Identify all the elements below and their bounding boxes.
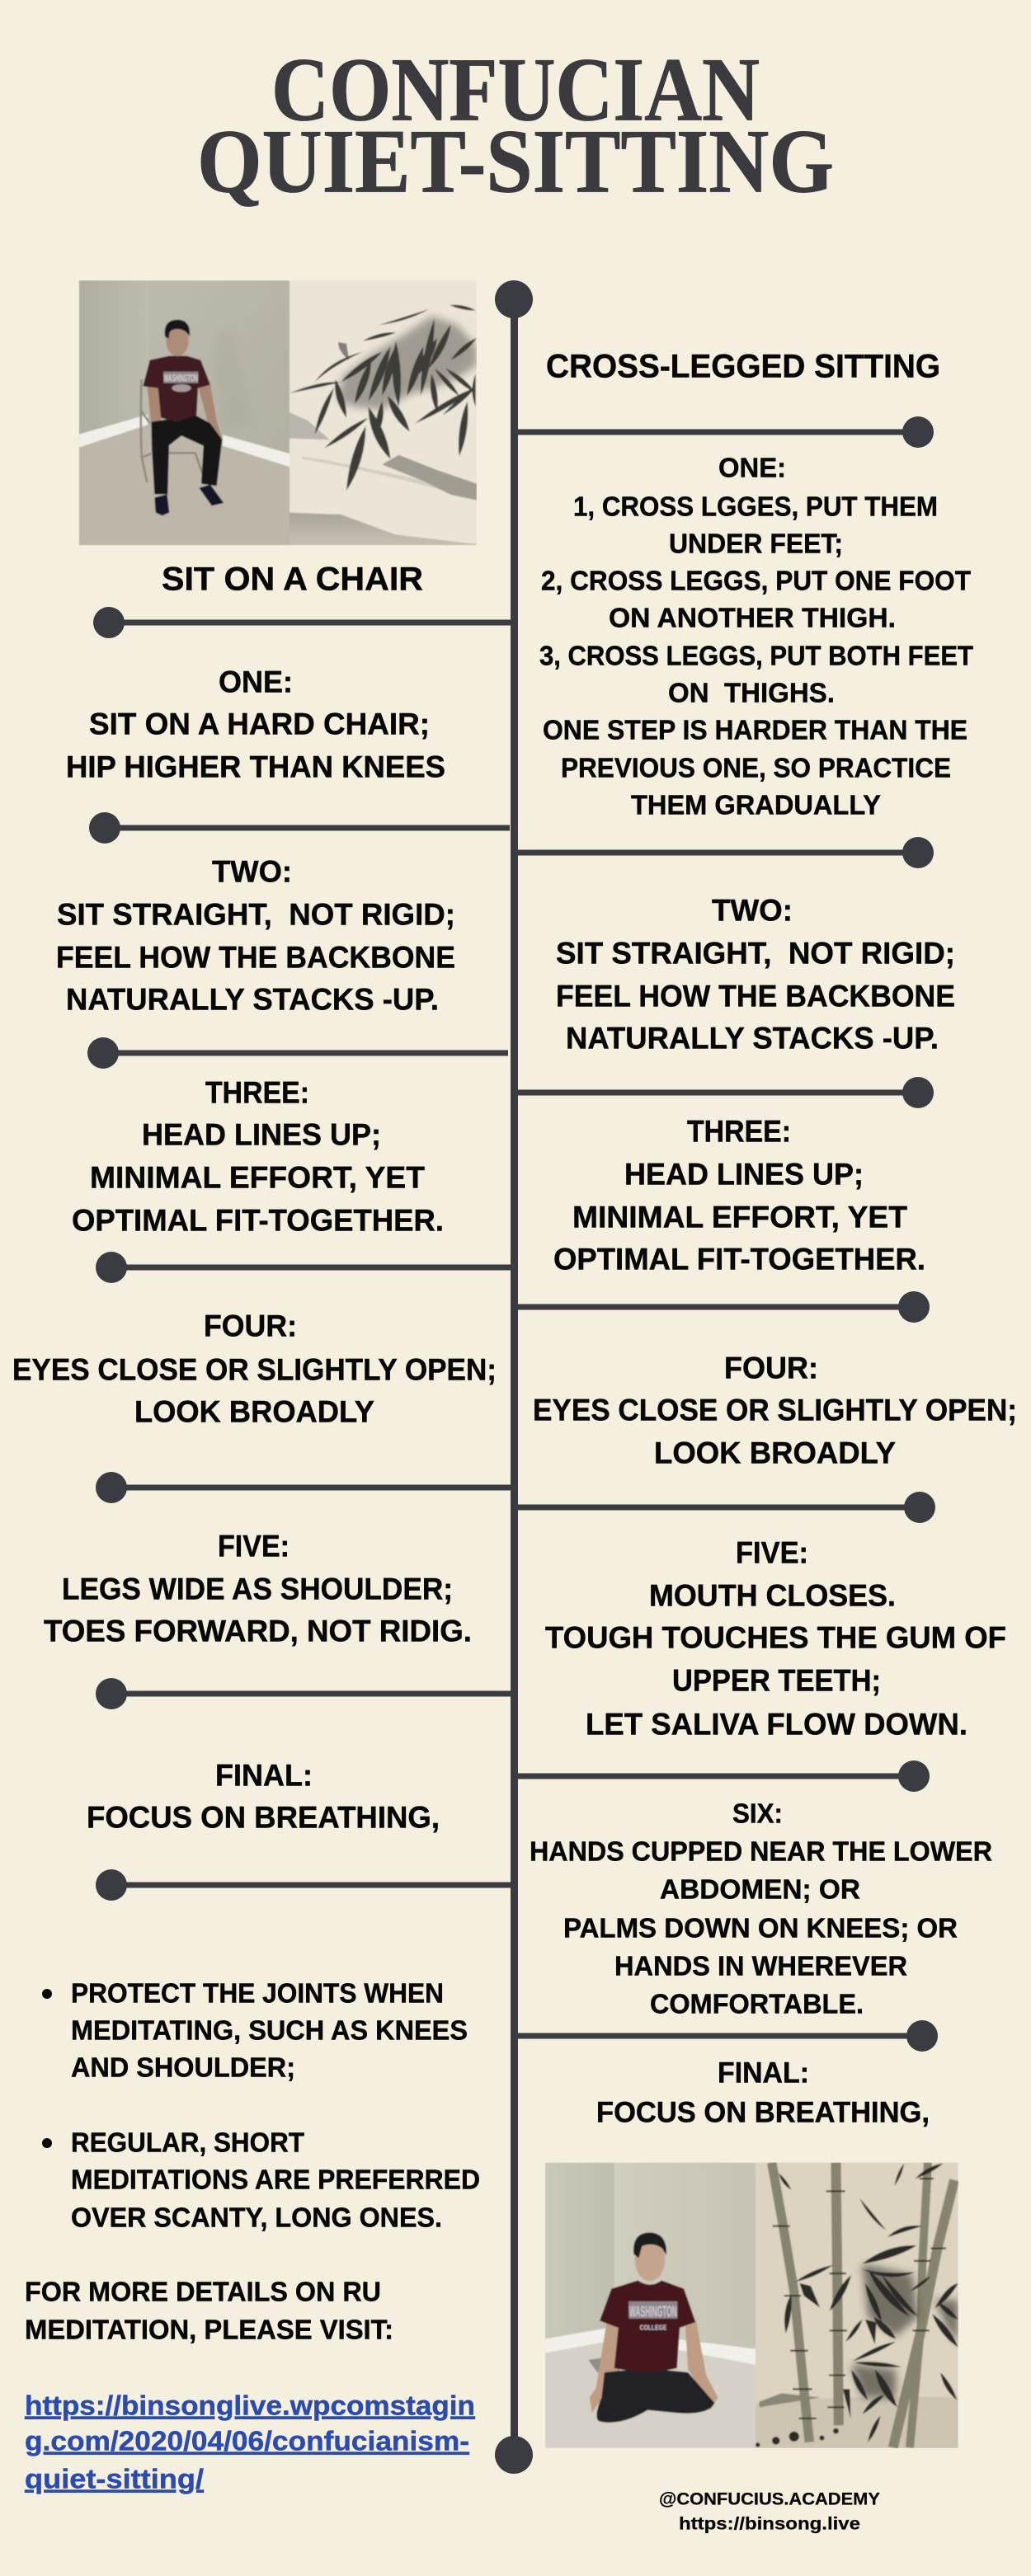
text: cross-legged step two: TWO: — [712, 894, 793, 927]
bullet list: tips — [42, 1977, 480, 2233]
photo: man sitting cross-legged with bamboo painting: COLLEGE — [640, 2325, 667, 2332]
text: cross-legged step six — [530, 1798, 992, 2019]
text: cross-legged step five — [545, 1535, 1006, 1742]
left branch 6 — [96, 1678, 511, 1709]
right branch 2 — [518, 837, 934, 868]
right branch 4 — [511, 1291, 930, 1323]
text: cross-legged step three: HEAD LINES UP; — [624, 1158, 864, 1191]
text: cross-legged step six: HANDS CUPPED NEAR THE LOWER — [530, 1836, 992, 1867]
bullet list: tips: AND SHOULDER; — [71, 2052, 295, 2083]
text: cross-legged step one: 1, CROSS LGGES, PUT THEM — [573, 491, 938, 521]
text: cross-legged step four: FOUR: — [724, 1351, 818, 1385]
heading: sit on a chair: SIT ON A CHAIR — [162, 561, 423, 597]
text: chair step one: ONE: — [219, 665, 293, 699]
text: cross-legged step one: 3, CROSS LEGGS, PUT BOTH FEET — [539, 640, 973, 671]
text: chair step three — [72, 1075, 444, 1237]
left branch 5 — [96, 1472, 511, 1503]
text: chair step five: LEGS WIDE AS SHOULDER; — [62, 1572, 453, 1606]
timeline spine — [495, 280, 533, 2474]
text: cross-legged step two: SIT STRAIGHT, NOT RIGID; — [556, 937, 955, 970]
text: chair step four: EYES CLOSE OR SLIGHTLY OPEN; — [12, 1352, 497, 1387]
footer credit — [659, 2489, 880, 2533]
text: cross-legged step six: ABDOMEN; OR — [660, 1873, 860, 1905]
link: https://binsonglive.wpcomstagin — [25, 2390, 475, 2421]
text: chair step three: OPTIMAL FIT-TOGETHER. — [72, 1204, 444, 1237]
left branch 2 — [89, 812, 510, 844]
text: cross-legged step five: LET SALIVA FLOW DOWN. — [586, 1707, 967, 1742]
text: chair step one: HIP HIGHER THAN KNEES — [66, 750, 445, 783]
text: cross-legged step one: ON THIGHS. — [668, 678, 835, 707]
text: chair step three: THREE: — [205, 1075, 309, 1110]
text: chair step four — [12, 1309, 497, 1428]
text: cross-legged step four — [533, 1351, 1017, 1469]
bullet list: tips: REGULAR, SHORT — [71, 2127, 304, 2157]
text: chair step one: SIT ON A HARD CHAIR; — [89, 707, 430, 740]
right branch 1 — [518, 416, 934, 448]
text: cross-legged step three: MINIMAL EFFORT, YET — [572, 1201, 907, 1234]
text: cross-legged step six: SIX: — [732, 1798, 783, 1829]
text: more details — [25, 2276, 393, 2345]
photo: man sitting cross-legged with bamboo painting: WASHINGTON — [629, 2302, 677, 2320]
text: chair step two: TWO: — [212, 854, 292, 889]
photo: man sitting cross-legged with bamboo painting — [545, 2163, 958, 2448]
right branch 6 — [511, 1760, 930, 1792]
text: chair step five: FIVE: — [218, 1529, 290, 1563]
text: cross-legged step one — [539, 452, 973, 820]
text: chair final — [87, 1758, 440, 1834]
footer credit: https://binsong.live — [679, 2513, 860, 2533]
text: cross-legged step one: ONE STEP IS HARDER THAN THE — [543, 714, 967, 745]
photo: man sitting on a chair with bamboo painting — [79, 280, 477, 545]
text: chair step two — [56, 854, 455, 1016]
text: more details: MEDITATION, PLEASE VISIT: — [25, 2314, 393, 2345]
title: CONFUCIAN — [271, 40, 760, 140]
text: chair final: FOCUS ON BREATHING, — [87, 1801, 440, 1834]
link: quiet-sitting/ — [25, 2464, 204, 2494]
left branch 7 — [96, 1869, 511, 1901]
text: chair step five — [44, 1529, 472, 1648]
text: cross-legged step four: EYES CLOSE OR SLIGHTLY OPEN; — [533, 1394, 1017, 1427]
text: cross-legged step one: UNDER FEET; — [669, 528, 843, 559]
text: chair step five: TOES FORWARD, NOT RIDIG. — [44, 1615, 472, 1648]
text: cross-legged step two: NATURALLY STACKS -UP. — [566, 1021, 939, 1055]
right branch 7 — [518, 2020, 938, 2052]
text: cross-legged step one: ONE: — [718, 452, 786, 483]
link: g.com/2020/04/06/confucianism- — [25, 2426, 469, 2456]
text: cross-legged step three: OPTIMAL FIT-TOGETHER. — [553, 1242, 925, 1276]
bullet list: tips: MEDITATIONS ARE PREFERRED — [71, 2164, 480, 2195]
text: chair step two: SIT STRAIGHT, NOT RIGID; — [57, 897, 455, 932]
text: cross-legged step one: PREVIOUS ONE, SO PRACTICE — [561, 752, 951, 783]
text: cross-legged step four: LOOK BROADLY — [654, 1436, 896, 1469]
text: chair step three: MINIMAL EFFORT, YET — [90, 1161, 425, 1194]
text: cross-legged step one: 2, CROSS LEGGS, PUT ONE FOOT — [541, 566, 971, 595]
text: cross-legged step five: MOUTH CLOSES. — [649, 1578, 896, 1613]
title — [197, 40, 834, 211]
text: cross-legged step one: THEM GRADUALLY — [631, 790, 881, 820]
bullet list: tips: PROTECT THE JOINTS WHEN — [71, 1977, 444, 2009]
text: cross-legged step two: FEEL HOW THE BACKBONE — [556, 980, 955, 1013]
title: QUIET-SITTING — [197, 110, 834, 211]
text: cross-legged step five: UPPER TEETH; — [672, 1664, 881, 1697]
text: cross-legged step five: TOUGH TOUCHES THE GUM OF — [545, 1621, 1006, 1654]
text: cross-legged step three — [553, 1115, 925, 1276]
text: chair step two: FEEL HOW THE BACKBONE — [56, 940, 455, 975]
photo: man sitting on a chair with bamboo painting: WASHINGTON — [164, 373, 198, 384]
link — [25, 2390, 475, 2494]
footer credit: @CONFUCIUS.ACADEMY — [659, 2489, 880, 2508]
heading: cross-legged sitting: CROSS-LEGGED SITTING — [546, 348, 940, 384]
text: chair step three: HEAD LINES UP; — [142, 1118, 381, 1151]
text: cross-legged step six: COMFORTABLE. — [650, 1989, 864, 2019]
text: cross-legged final: FINAL: — [718, 2057, 809, 2089]
text: chair step two: NATURALLY STACKS -UP. — [66, 983, 439, 1016]
bullet list: tips: OVER SCANTY, LONG ONES. — [71, 2202, 442, 2233]
text: chair step four: FOUR: — [204, 1309, 297, 1342]
text: cross-legged final: FOCUS ON BREATHING, — [596, 2096, 930, 2129]
text: cross-legged step one: ON ANOTHER THIGH. — [609, 602, 896, 633]
text: chair step four: LOOK BROADLY — [134, 1395, 374, 1428]
text: cross-legged step two — [556, 894, 955, 1055]
text: cross-legged step six: PALMS DOWN ON KNEES; OR — [563, 1913, 958, 1943]
left branch 4 — [96, 1252, 511, 1283]
right branch 5 — [518, 1492, 935, 1523]
text: more details: FOR MORE DETAILS ON RU — [25, 2276, 381, 2307]
text: chair step one — [66, 665, 445, 783]
text: chair final: FINAL: — [215, 1758, 313, 1793]
left branch 1 — [93, 607, 511, 638]
left branch 3 — [87, 1037, 508, 1069]
text: cross-legged step five: FIVE: — [736, 1535, 808, 1570]
right branch 3 — [518, 1077, 934, 1108]
text: cross-legged step six: HANDS IN WHEREVER — [614, 1951, 907, 1981]
text: cross-legged step three: THREE: — [687, 1115, 791, 1148]
text: cross-legged final — [596, 2057, 930, 2129]
bullet list: tips: MEDITATING, SUCH AS KNEES — [71, 2015, 468, 2045]
